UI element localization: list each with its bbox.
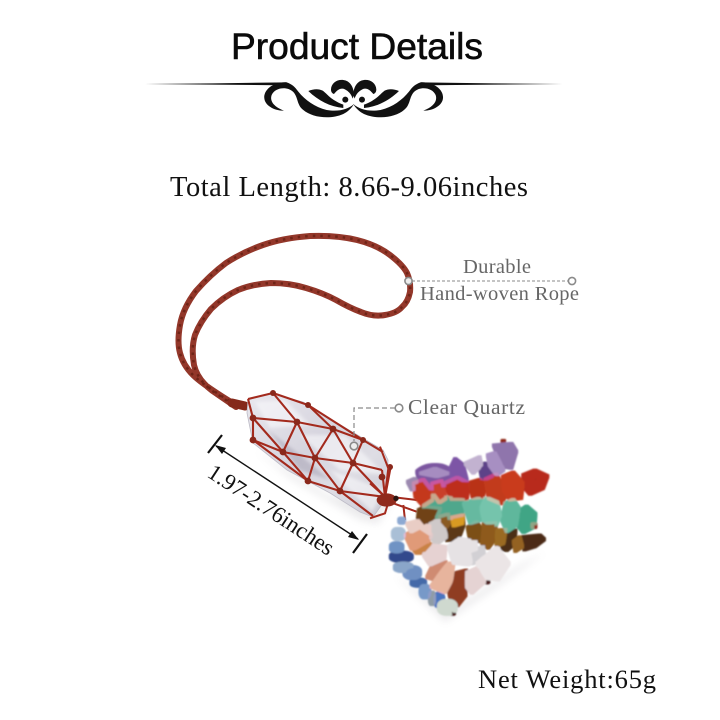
tassel knot and cords [370,447,417,520]
carnelian chips [405,527,467,606]
total length label: Total Length: 8.66-9.06inches [170,172,528,203]
width dimension label: 1.97-2.76inches [203,459,339,560]
rope callout label [420,256,579,305]
ornamental divider [145,80,562,117]
red net cords [248,393,391,516]
quartz callout label: Clear Quartz [408,395,525,419]
tiger eye strand [417,507,545,552]
aventurine strand [423,495,536,533]
rope callout leader [405,277,576,285]
net knots [250,390,393,500]
width dimension arrow [208,435,367,553]
clear quartz and rose chips [407,520,509,593]
quartz callout leader [350,404,403,450]
rope callout label: Durable [463,256,531,278]
red jasper strand [413,470,548,506]
shadow under pendant [256,450,545,622]
braided rope [178,236,410,407]
crystal body [247,393,388,517]
gemstone chip tassel [390,440,548,614]
rope callout label: Hand-woven Rope [420,283,579,305]
title: Product Details [231,26,483,67]
sodalite strand [390,518,456,614]
amethyst strand [407,440,517,490]
net weight label: Net Weight:65g [478,664,656,694]
clear quartz crystal in net [247,390,393,517]
